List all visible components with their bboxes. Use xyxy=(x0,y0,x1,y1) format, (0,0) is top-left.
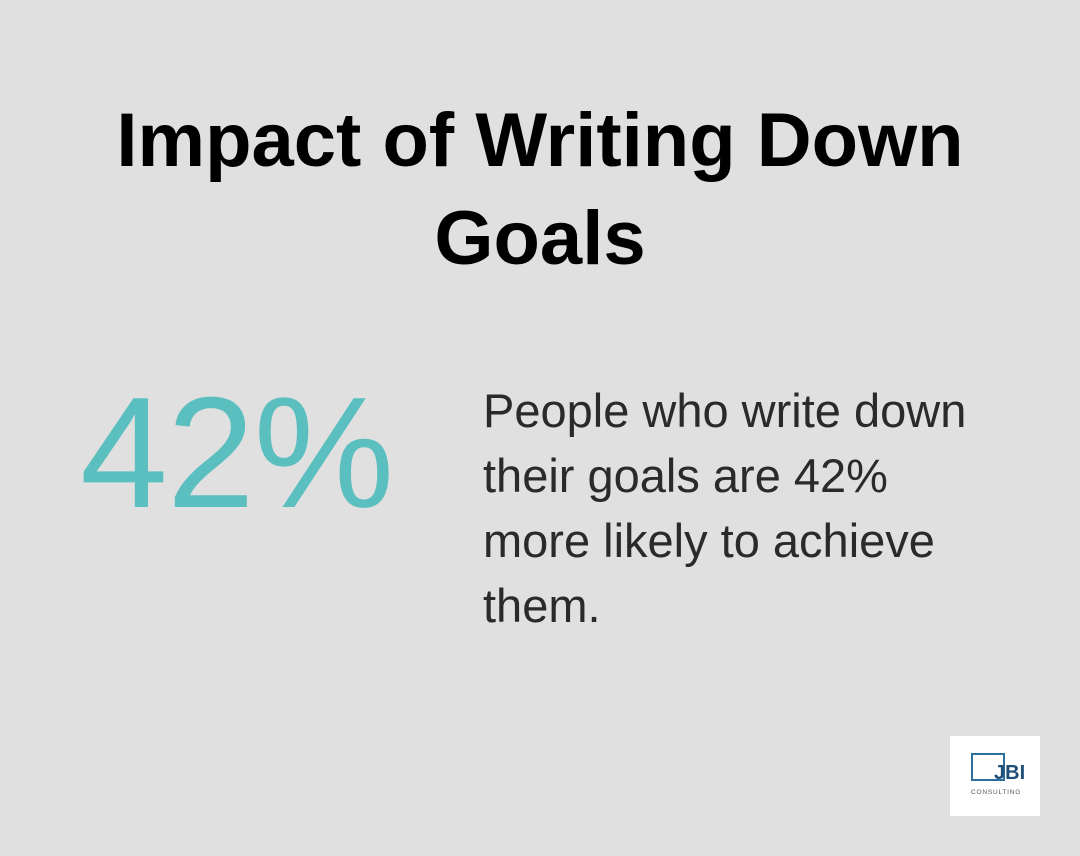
stat number: 42% xyxy=(80,365,393,541)
title: Goals xyxy=(434,196,646,281)
description text: them. xyxy=(483,579,601,632)
description text xyxy=(483,384,966,632)
title: Impact of Writing Down xyxy=(116,98,964,183)
logo xyxy=(950,736,1040,816)
description text: their goals are 42% xyxy=(483,449,888,502)
logo: CONSULTING xyxy=(971,789,1021,796)
description text: People who write down xyxy=(483,384,966,437)
logo: JBI xyxy=(994,762,1025,784)
title xyxy=(116,98,964,281)
description text: more likely to achieve xyxy=(483,514,935,567)
